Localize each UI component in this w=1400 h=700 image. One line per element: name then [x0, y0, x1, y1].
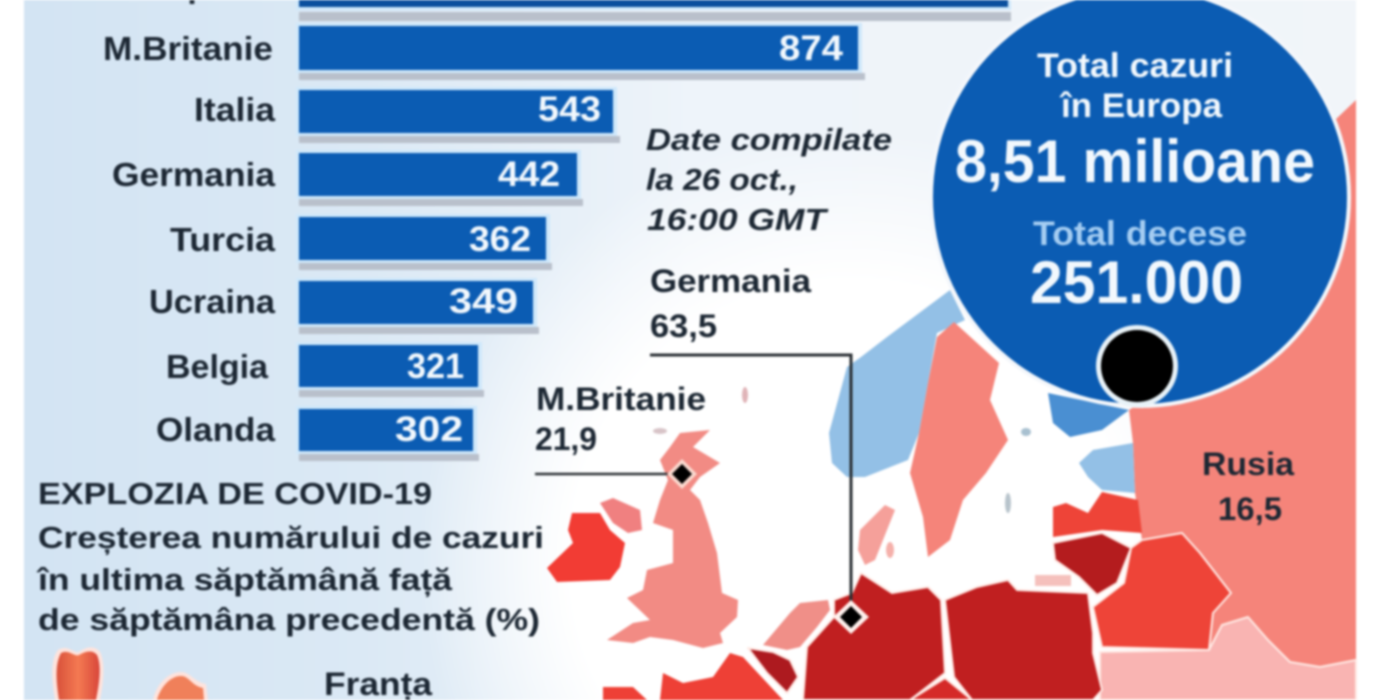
heading: Explozia de COVID-19	[36, 476, 544, 637]
bar: Ucraina: 349	[449, 282, 518, 321]
marker: M.Britanie	[667, 459, 697, 489]
callout: totals circle	[929, 0, 1351, 408]
callout: totals circle: Total decese	[1033, 215, 1247, 253]
note: data date: Date compilate	[646, 122, 892, 157]
country: Tarile de Jos	[763, 600, 830, 650]
bar: Turcia	[170, 214, 552, 270]
callout: totals circle: 251.000	[1030, 249, 1243, 316]
leader line: M.Britanie	[535, 459, 697, 489]
country: Germania	[803, 573, 945, 700]
bar: Germania: 442	[498, 155, 560, 194]
icon: virus spike large	[52, 647, 103, 700]
country: Norvegia	[829, 290, 965, 477]
map of Europe	[547, 100, 1356, 700]
bar: Olanda: Olanda	[156, 411, 276, 448]
callout: totals circle: în Europa	[1059, 87, 1223, 125]
country: Cehia	[910, 678, 972, 700]
note: data date: la 26 oct.,	[646, 162, 798, 197]
country: Estonia	[1079, 443, 1135, 493]
country: Franta	[603, 653, 783, 700]
islands: Baltic and Danish	[653, 387, 1071, 586]
bar: M.Britanie: 874	[779, 29, 844, 68]
country: Letonia	[1053, 492, 1142, 537]
bar: Ucraina: Ucraina	[149, 283, 276, 320]
bar: Turcia: 362	[469, 220, 531, 259]
subheading: de săptămâna precedentă (%)	[38, 602, 540, 637]
bar: Belgia	[166, 342, 484, 397]
country: M.Britanie	[607, 430, 738, 648]
map label: M.Britanie: M.Britanie	[536, 381, 706, 417]
country: Ucraina	[1100, 617, 1356, 700]
bar: M.Britanie	[103, 23, 865, 80]
country: Irlanda	[547, 513, 625, 582]
bar: Germania: Germania	[112, 156, 276, 193]
callout: totals circle: Total cazuri	[1037, 47, 1233, 85]
bar: Germania	[112, 150, 583, 206]
map label: Germania	[650, 263, 811, 344]
bar: Olanda: 302	[395, 410, 463, 449]
country: Danemarca	[858, 505, 895, 565]
heading: Explozia de COVID-19: EXPLOZIA DE COVID-19	[38, 476, 432, 511]
bar: Italia	[194, 87, 620, 143]
bar: Ucraina	[149, 278, 539, 334]
map label: Rusia: Rusia	[1202, 446, 1294, 482]
bar: Spania	[165, 0, 1011, 21]
country: Rusia	[1129, 100, 1356, 700]
map label: Germania: 63,5	[650, 308, 717, 344]
map label: Germania: Germania	[650, 263, 811, 299]
country: Polonia	[945, 580, 1102, 700]
subheading	[36, 520, 544, 637]
subheading: Creșterea numărului de cazuri	[38, 520, 544, 555]
country: Suedia	[910, 322, 1008, 557]
note: data date: 16:00 GMT	[647, 202, 829, 237]
bar: Belgia: 321	[407, 347, 464, 386]
country: Finlanda	[1048, 393, 1129, 437]
marker: Germania	[833, 600, 869, 634]
bar: M.Britanie: M.Britanie	[103, 30, 273, 67]
bar: Italia: 543	[538, 90, 601, 129]
note: data date	[646, 122, 892, 237]
country: Belgia	[748, 648, 798, 693]
map label: Rusia: 16,5	[1218, 491, 1282, 527]
country: Lituania	[1053, 533, 1131, 595]
subheading: în ultima săptămână față	[36, 562, 453, 597]
bar chart: cases by country	[103, 0, 1011, 461]
icon: virus spike small	[153, 672, 208, 700]
callout: totals circle: 8,51 milioane	[955, 128, 1315, 195]
bar: Turcia: Turcia	[170, 221, 276, 258]
country: Belarus	[1093, 533, 1231, 650]
country: Irlanda de Nord	[600, 498, 642, 533]
map label: M.Britanie	[535, 381, 706, 457]
leader line: Germania	[650, 355, 869, 634]
bar: Belgia: Belgia	[166, 348, 269, 385]
icon: black dot	[1096, 325, 1178, 407]
map label: M.Britanie: 21,9	[535, 421, 597, 457]
bar: Italia: Italia	[194, 91, 276, 128]
bar: Olanda	[156, 406, 479, 461]
map label: Rusia	[1202, 446, 1294, 527]
